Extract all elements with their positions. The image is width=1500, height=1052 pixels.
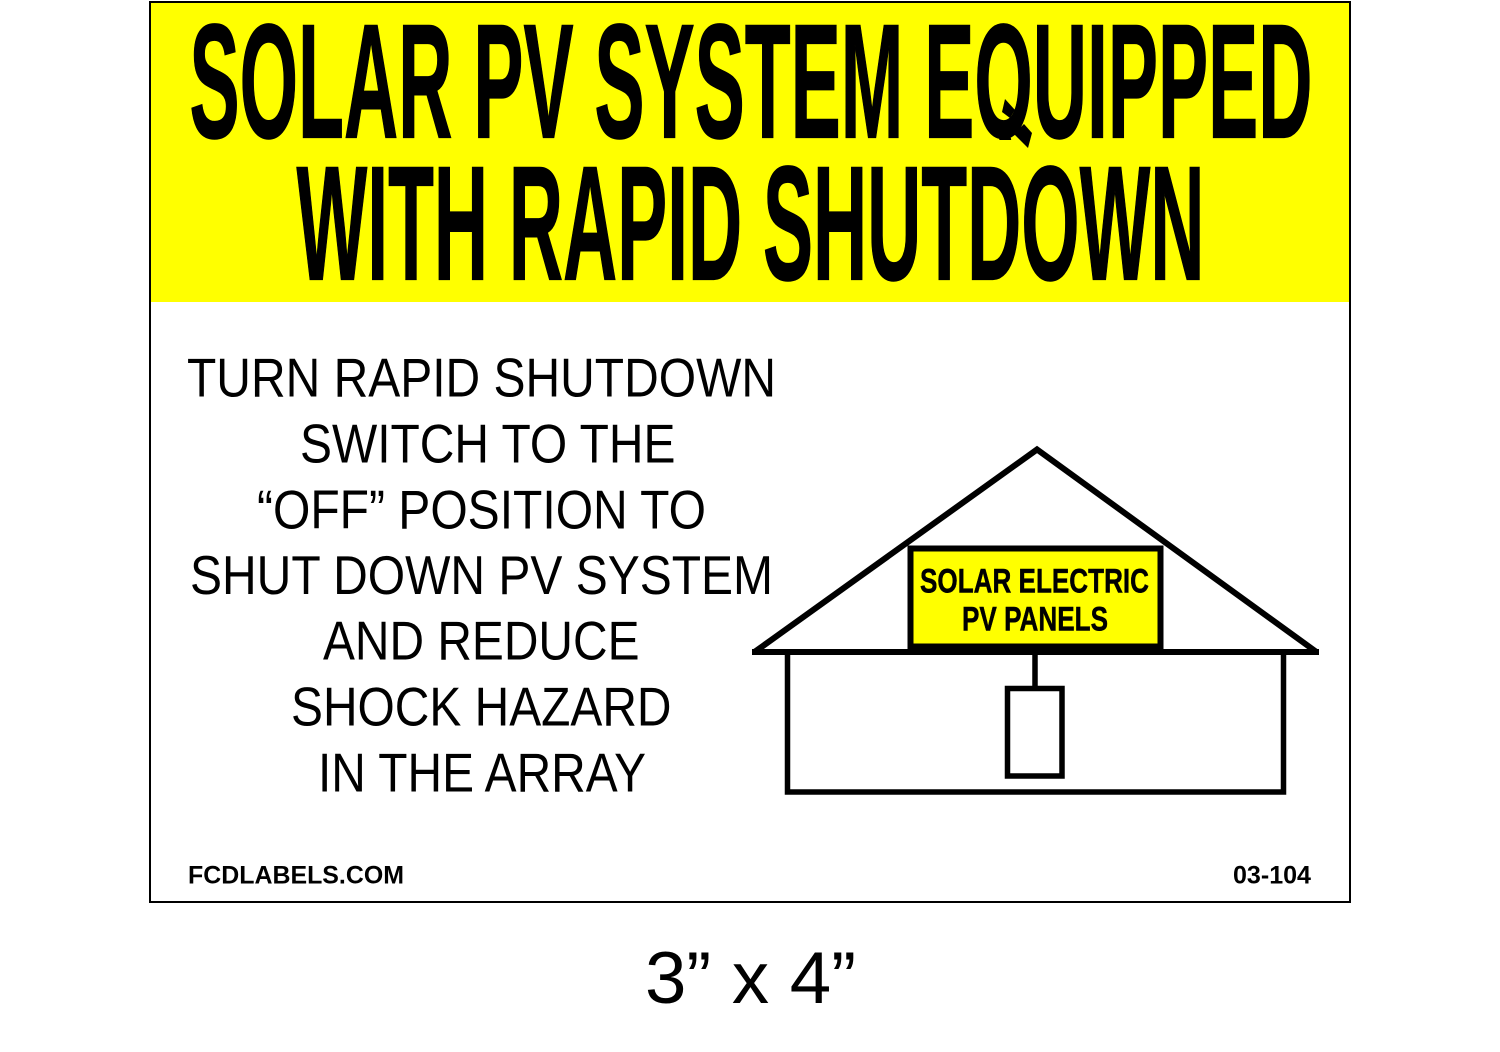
panel label line 2: PV PANELS bbox=[962, 600, 1108, 638]
instruction line 6: SHOCK HAZARD bbox=[291, 676, 672, 738]
instruction line 4: SHUT DOWN PV SYSTEM bbox=[190, 544, 773, 606]
instruction line 7: IN THE ARRAY bbox=[318, 742, 646, 804]
panel: label border bbox=[150, 2, 1350, 902]
instruction line 2: SWITCH TO THE bbox=[300, 412, 676, 474]
instruction line 3: “OFF” POSITION TO bbox=[257, 478, 706, 540]
footer: part number: 03-104 bbox=[1233, 862, 1311, 890]
roof base line bbox=[752, 649, 1319, 655]
house roof bbox=[754, 450, 1316, 652]
instruction line 5: AND REDUCE bbox=[323, 610, 640, 672]
house walls bbox=[788, 652, 1284, 792]
infographic: solar PV rapid shutdown label bbox=[149, 1, 1351, 1004]
connector line bbox=[1032, 648, 1038, 688]
footer: website: FCDLABELS.COM bbox=[188, 862, 404, 890]
instruction line 1: TURN RAPID SHUTDOWN bbox=[187, 346, 776, 408]
solar electric panel sign bbox=[910, 548, 1160, 646]
title line 1 bbox=[191, 23, 1310, 148]
icon: house with solar panels and switch bbox=[752, 450, 1319, 792]
title bbox=[191, 23, 1310, 282]
rapid shutdown switch box bbox=[1008, 688, 1062, 776]
panel: yellow title banner bbox=[150, 2, 1350, 302]
instruction text block bbox=[187, 346, 776, 804]
size caption: 3” x 4” bbox=[645, 938, 856, 1019]
panel label line 1: SOLAR ELECTRIC bbox=[920, 562, 1149, 600]
